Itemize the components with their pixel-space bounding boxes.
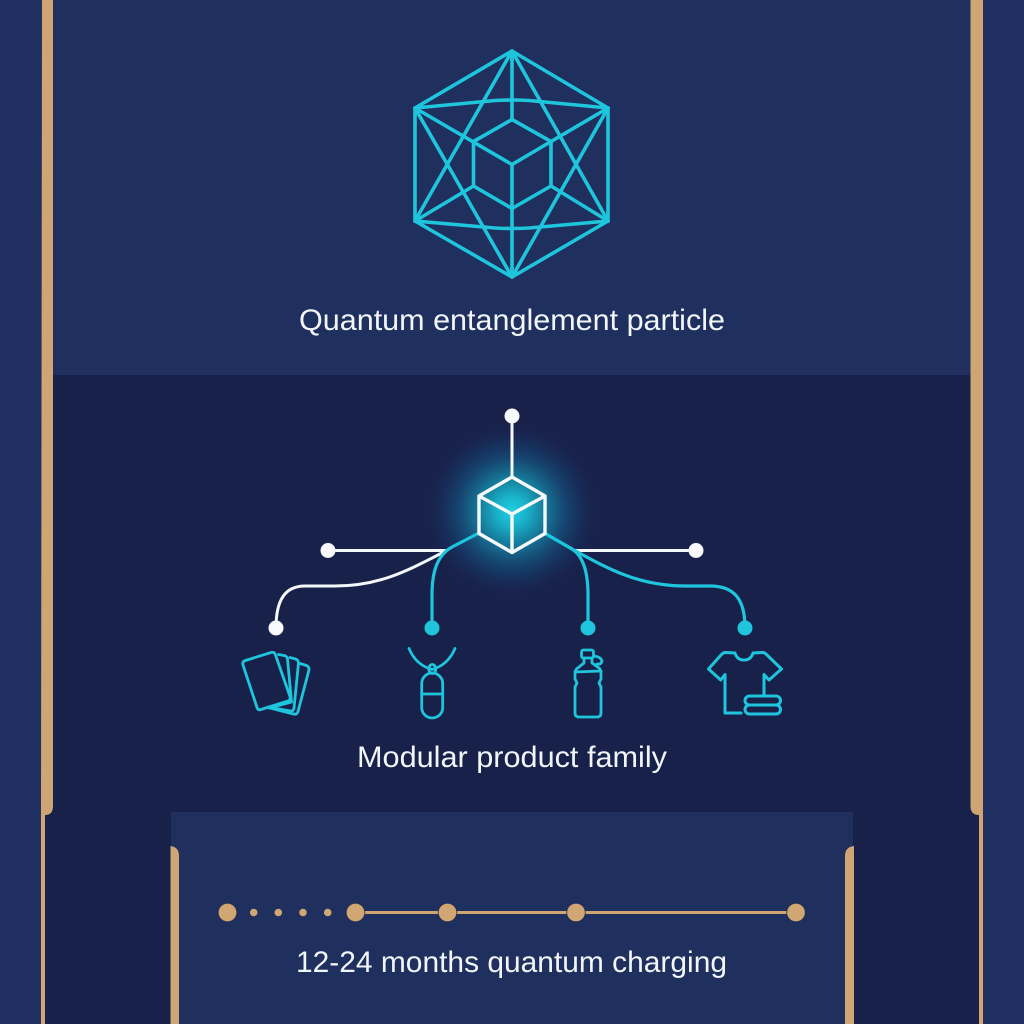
right connector bbox=[573, 543, 704, 558]
panel: quantum particle bbox=[53, 0, 970, 375]
cube glow bbox=[420, 419, 604, 603]
curve to bottle bbox=[546, 534, 596, 636]
curve to shirt bbox=[546, 534, 752, 636]
heading: quantum entanglement particle: Quantum entanglement particle bbox=[299, 304, 725, 337]
right gold panel rail bbox=[845, 846, 854, 1024]
dark panel: outer frame bbox=[45, 375, 979, 1024]
left gold panel rail bbox=[170, 846, 179, 1024]
right gold frame rail bbox=[970, 0, 983, 1024]
icon: quantum particle polyhedron bbox=[415, 51, 608, 277]
diagram: modular product network bbox=[243, 408, 782, 718]
curve to cards bbox=[268, 550, 447, 636]
icon: shirt and folded towels bbox=[708, 652, 782, 714]
timeline nodes bbox=[218, 903, 805, 922]
timeline: charging dots bbox=[218, 903, 805, 922]
curve to pendant bbox=[424, 533, 479, 636]
left gold frame rail bbox=[41, 0, 53, 1024]
heading: modular product family: Modular product family bbox=[357, 741, 667, 774]
panel: charging timeline bbox=[171, 812, 853, 1024]
top connector bbox=[504, 408, 520, 477]
icon: bottle bbox=[575, 650, 602, 717]
icon: pendant bbox=[409, 648, 455, 718]
icon: glowing cube bbox=[479, 477, 545, 552]
left connector bbox=[320, 543, 446, 558]
timeline track bbox=[355, 911, 796, 914]
heading: 12-24 months quantum charging: 12-24 months quantum charging bbox=[296, 946, 727, 979]
timeline small dots bbox=[250, 909, 332, 916]
icon: cards bbox=[243, 652, 309, 714]
